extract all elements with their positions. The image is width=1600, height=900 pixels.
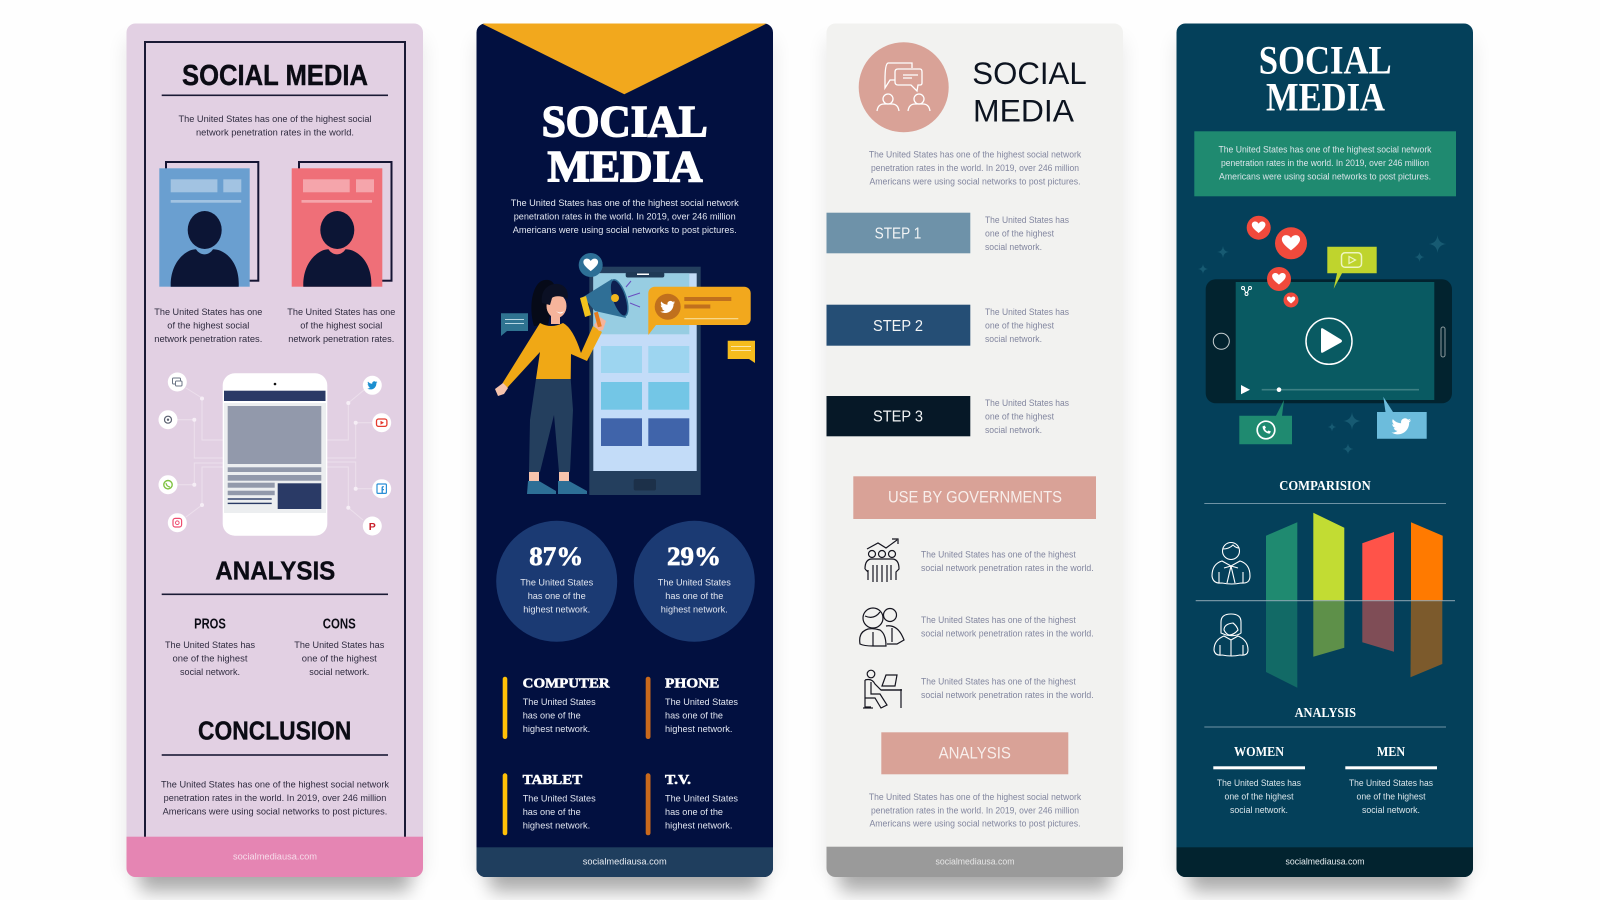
- step 3 text: The United States has: [985, 398, 1069, 409]
- icon: person at desk: [863, 670, 902, 708]
- step 3 bar: [826, 396, 970, 436]
- icon: two people: [860, 608, 904, 646]
- icon: pinterest: P: [369, 521, 376, 533]
- footer: grey: [826, 847, 1123, 877]
- pros column: The United States has: [165, 640, 255, 651]
- icon: whatsapp: [158, 475, 178, 494]
- icon: megaphone: [580, 278, 640, 327]
- column: women: The United States has: [1217, 778, 1301, 789]
- item: tv: [646, 773, 738, 835]
- item: tv: highest network.: [665, 820, 732, 831]
- banner: yellow chevron: [482, 24, 767, 94]
- analysis text: [869, 792, 1081, 830]
- callout: video bubble: [1327, 247, 1377, 289]
- icon: man: [1212, 542, 1250, 584]
- row text 2: social network penetration rates in the world.: [921, 628, 1094, 640]
- pros column: one of the highest: [172, 654, 248, 664]
- intro text: Americans were using social networks to post pictures.: [513, 225, 737, 236]
- panel: grey social media card: [826, 24, 1123, 892]
- row text 1: The United States has one of the highest: [921, 550, 1076, 561]
- item: computer: The United States: [523, 697, 596, 708]
- row text 3: The United States has one of the highest: [921, 676, 1076, 687]
- footer: pink: [126, 837, 423, 877]
- conclusion text: penetration rates in the world. In 2019, over 246 million: [164, 793, 386, 804]
- item: computer: has one of the: [523, 710, 581, 722]
- intro text: [869, 150, 1081, 188]
- icon: heart badge: [579, 253, 603, 277]
- illustration: tablet wireframe: [223, 373, 327, 536]
- pros column: social network.: [180, 667, 240, 678]
- chart: mirrored bars: [1196, 513, 1455, 688]
- row text 3: [921, 676, 1094, 701]
- column: men: one of the highest: [1356, 792, 1426, 802]
- title: social media: MEDIA: [973, 93, 1074, 129]
- icon: team growth: [865, 539, 899, 582]
- step 3 text: one of the highest: [985, 412, 1054, 422]
- decorative sparkles: [1198, 235, 1446, 454]
- caption: right profile: of the highest social: [300, 320, 382, 332]
- intro text: penetration rates in the world. In 2019, over 246 million: [871, 163, 1079, 174]
- heading: comparision: COMPARISION: [1279, 479, 1371, 494]
- intro box: penetration rates in the world. In 2019, over 246 million: [1221, 158, 1429, 169]
- intro text: [178, 114, 372, 138]
- item: tv: T.V.: [665, 773, 691, 788]
- icon: woman: [1214, 614, 1248, 656]
- caption: right profile: The United States has one: [287, 307, 395, 318]
- cons column: social network.: [309, 667, 369, 678]
- icon: twitter: [363, 376, 382, 395]
- column: men: MEN: [1377, 745, 1405, 760]
- heading: use by governments: USE BY GOVERNMENTS: [888, 489, 1062, 507]
- title: social media: MEDIA: [548, 142, 703, 191]
- step 2 bar: [826, 305, 970, 346]
- heading: analysis: [881, 732, 1068, 774]
- intro box: The United States has one of the highest social network: [1218, 145, 1432, 156]
- intro text: Americans were using social networks to post pictures.: [870, 177, 1080, 188]
- callout: twitter bubble: [648, 287, 751, 335]
- cons column: [294, 616, 384, 678]
- cons column: The United States has: [294, 640, 384, 651]
- item: tv: The United States: [665, 793, 738, 804]
- step 1 text: The United States has: [985, 215, 1069, 226]
- illustration: woman with megaphone: [495, 280, 606, 494]
- item: computer: highest network.: [523, 724, 590, 735]
- stat circle: 29%: highest network.: [661, 604, 728, 615]
- footer: dark teal: socialmediausa.com: [1286, 857, 1365, 868]
- item: tablet: has one of the: [523, 807, 581, 818]
- row text 1: [921, 550, 1094, 574]
- icon: at sign: [158, 410, 178, 429]
- analysis text: The United States has one of the highest social network: [869, 792, 1081, 803]
- title: social media: SOCIAL: [972, 55, 1087, 91]
- icon: facebook: [372, 479, 391, 498]
- row text 2: The United States has one of the highest: [921, 615, 1076, 626]
- column: men: social network.: [1362, 805, 1420, 816]
- item: phone: The United States: [665, 697, 738, 708]
- caption: left profile: The United States has one: [154, 307, 262, 318]
- step 1 text: social network.: [985, 242, 1042, 253]
- caption: left profile: [154, 307, 262, 345]
- analysis text: Americans were using social networks to post pictures.: [870, 819, 1080, 830]
- icon: hearts: [1247, 216, 1307, 308]
- intro text: The United States has one of the highest social network: [869, 150, 1081, 161]
- panel: navy social media card: [476, 24, 773, 892]
- column: women: [1213, 745, 1305, 816]
- item: tablet: [503, 773, 596, 835]
- icon: pinterest: [363, 516, 382, 536]
- heading: conclusion: CONCLUSION: [198, 715, 351, 745]
- stat circle: 87%: highest network.: [523, 604, 590, 615]
- stat circle: 29%: The United States: [658, 577, 731, 588]
- stat circle: 87%: has one of the: [528, 591, 586, 602]
- item: tv: has one of the: [665, 807, 723, 818]
- heading: analysis: ANALYSIS: [1295, 705, 1356, 720]
- intro box: [1194, 131, 1456, 196]
- cons column: CONS: [323, 616, 356, 632]
- callout: whatsapp bubble: [1239, 400, 1292, 444]
- item: phone: PHONE: [665, 676, 719, 691]
- profile card: blue: [159, 162, 258, 287]
- step 3 text: [985, 398, 1069, 436]
- footer: slate: [476, 847, 773, 877]
- title: social media: MEDIA: [1266, 75, 1385, 120]
- illustration: large phone: [589, 267, 701, 495]
- stat circle: 29%: [634, 521, 755, 642]
- heading: analysis: ANALYSIS: [215, 555, 335, 585]
- heading: analysis: ANALYSIS: [939, 745, 1011, 763]
- title: social media: [542, 97, 708, 191]
- phone connector network: [177, 388, 372, 520]
- caption: left profile: network penetration rates.: [154, 334, 262, 345]
- stat circle: 29%: has one of the: [665, 591, 723, 602]
- conclusion text: [161, 780, 389, 818]
- footer: pink: socialmediausa.com: [233, 852, 317, 863]
- footer: grey: socialmediausa.com: [936, 856, 1015, 867]
- icon: youtube: [372, 413, 391, 432]
- intro text: The United States has one of the highest social network: [511, 198, 739, 209]
- step 1 bar: [826, 213, 970, 253]
- step 1 text: [985, 215, 1069, 253]
- item: computer: COMPUTER: [523, 676, 611, 691]
- column: women: one of the highest: [1224, 792, 1294, 802]
- column: women: social network.: [1230, 805, 1288, 816]
- item: tablet: The United States: [523, 793, 596, 804]
- footer: dark teal: [1176, 847, 1473, 877]
- caption: right profile: network penetration rates.: [288, 334, 394, 345]
- stat circle: 87%: 87%: [529, 542, 583, 571]
- callout: twitter bubble: [1377, 397, 1427, 439]
- intro text: [511, 198, 739, 236]
- step 1 text: one of the highest: [985, 228, 1054, 240]
- column: women: WOMEN: [1234, 745, 1284, 760]
- analysis text: penetration rates in the world. In 2019, over 246 million: [871, 805, 1079, 816]
- stat circle: 87%: [496, 521, 617, 642]
- step 2 text: The United States has: [985, 307, 1069, 318]
- heading: use by governments: [853, 476, 1096, 519]
- title: social media: SOCIAL: [542, 97, 708, 146]
- item: phone: highest network.: [665, 724, 732, 735]
- cons column: one of the highest: [302, 654, 377, 664]
- pros column: [165, 616, 255, 678]
- icon: conversation badge: [859, 42, 949, 132]
- title: social media: [972, 55, 1087, 129]
- row text 3: social network penetration rates in the world.: [921, 690, 1094, 701]
- stat circle: 87%: The United States: [520, 577, 593, 588]
- item: phone: [646, 676, 738, 739]
- conclusion text: The United States has one of the highest social network: [161, 780, 389, 791]
- title: social media: SOCIAL: [1259, 37, 1392, 82]
- step 2 bar: STEP 2: [873, 318, 923, 335]
- caption: right profile: [287, 307, 395, 345]
- step 3 text: social network.: [985, 425, 1042, 436]
- row text 2: [921, 615, 1094, 640]
- item: tablet: TABLET: [523, 773, 583, 788]
- caption: left profile: of the highest social: [167, 320, 249, 332]
- row text 1: social network penetration rates in the world.: [921, 563, 1094, 574]
- intro text: penetration rates in the world. In 2019, over 246 million: [514, 212, 736, 222]
- panel: pink social media card: [126, 24, 423, 892]
- step 1 bar: STEP 1: [875, 225, 921, 242]
- title: social media: [1259, 37, 1392, 120]
- icon: chat: [168, 372, 187, 392]
- icon: small yellow chat bubble: [728, 341, 755, 363]
- intro box: Americans were using social networks to post pictures.: [1219, 172, 1431, 182]
- pros column: PROS: [194, 616, 226, 632]
- conclusion text: Americans were using social networks to post pictures.: [163, 806, 387, 818]
- heading: social media: SOCIAL MEDIA: [182, 60, 368, 92]
- panel: teal social media card: [1176, 24, 1473, 892]
- step 2 text: social network.: [985, 334, 1042, 345]
- step 3 bar: STEP 3: [873, 409, 923, 426]
- icon: instagram: [168, 513, 187, 532]
- profile card: red: [292, 162, 392, 287]
- intro text: The United States has one of the highest social: [178, 114, 372, 125]
- stat circle: 29%: 29%: [667, 542, 721, 571]
- intro text: network penetration rates in the world.: [196, 128, 354, 138]
- step 2 text: one of the highest: [985, 320, 1054, 332]
- illustration: landscape phone with video: [1206, 279, 1452, 403]
- item: tablet: highest network.: [523, 820, 590, 831]
- item: computer: [503, 676, 611, 739]
- item: phone: has one of the: [665, 710, 723, 722]
- footer: slate: socialmediausa.com: [583, 857, 667, 868]
- column: men: The United States has: [1349, 778, 1433, 789]
- column: men: [1345, 745, 1437, 816]
- step 2 text: [985, 307, 1069, 345]
- icon: small blue chat bubble: [501, 313, 528, 336]
